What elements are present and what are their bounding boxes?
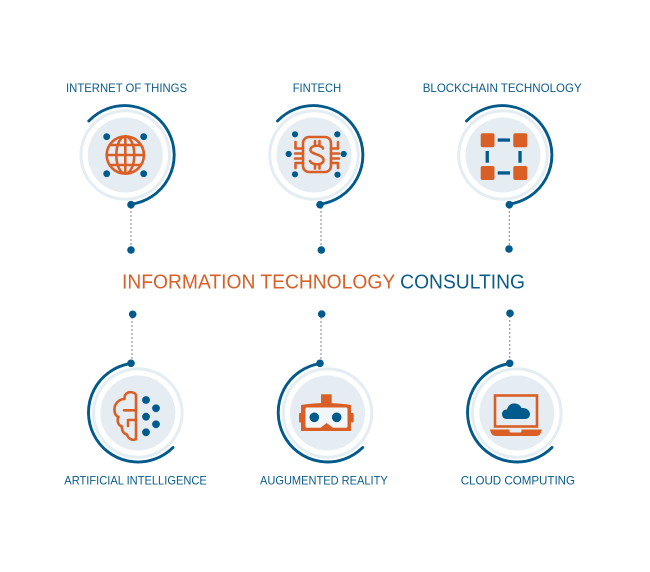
- badge circle: [278, 364, 372, 462]
- icon: dollar chip: [286, 131, 347, 178]
- badge circle: [459, 106, 552, 204]
- label: internet of things: INTERNET OF THINGS: [66, 81, 187, 95]
- label: blockchain technology: BLOCKCHAIN TECHNOLOGY: [423, 81, 582, 95]
- connector: [127, 201, 135, 254]
- title: INFORMATION TECHNOLOGY CONSULTING: [122, 272, 525, 294]
- item: artificial intelligence: [64, 310, 207, 487]
- badge circle: [270, 106, 363, 204]
- icon: blockchain squares: [481, 133, 527, 180]
- item: cloud computing: [461, 310, 575, 487]
- badge circle: [81, 106, 174, 204]
- item: internet of things: [66, 81, 187, 254]
- connector: [316, 310, 326, 367]
- item: augumented reality: [260, 310, 388, 487]
- connector: [505, 201, 513, 253]
- badge circle: [468, 364, 561, 462]
- item: blockchain technology: [423, 81, 582, 253]
- label: augumented reality: AUGUMENTED REALITY: [260, 473, 388, 487]
- icon: vr headset: [299, 394, 354, 431]
- label: cloud computing: CLOUD COMPUTING: [461, 473, 575, 487]
- connector: [506, 310, 514, 367]
- icon: brain with nodes: [114, 392, 160, 440]
- connector: [316, 201, 325, 254]
- icon: laptop with cloud: [490, 396, 542, 436]
- connector: [127, 310, 136, 367]
- label: artificial intelligence: ARTIFICIAL INTELLIGENCE: [64, 473, 207, 487]
- icon: globe: [103, 133, 147, 177]
- badge circle: [88, 364, 182, 462]
- label: fintech: FINTECH: [293, 81, 341, 95]
- item: fintech: [270, 81, 363, 254]
